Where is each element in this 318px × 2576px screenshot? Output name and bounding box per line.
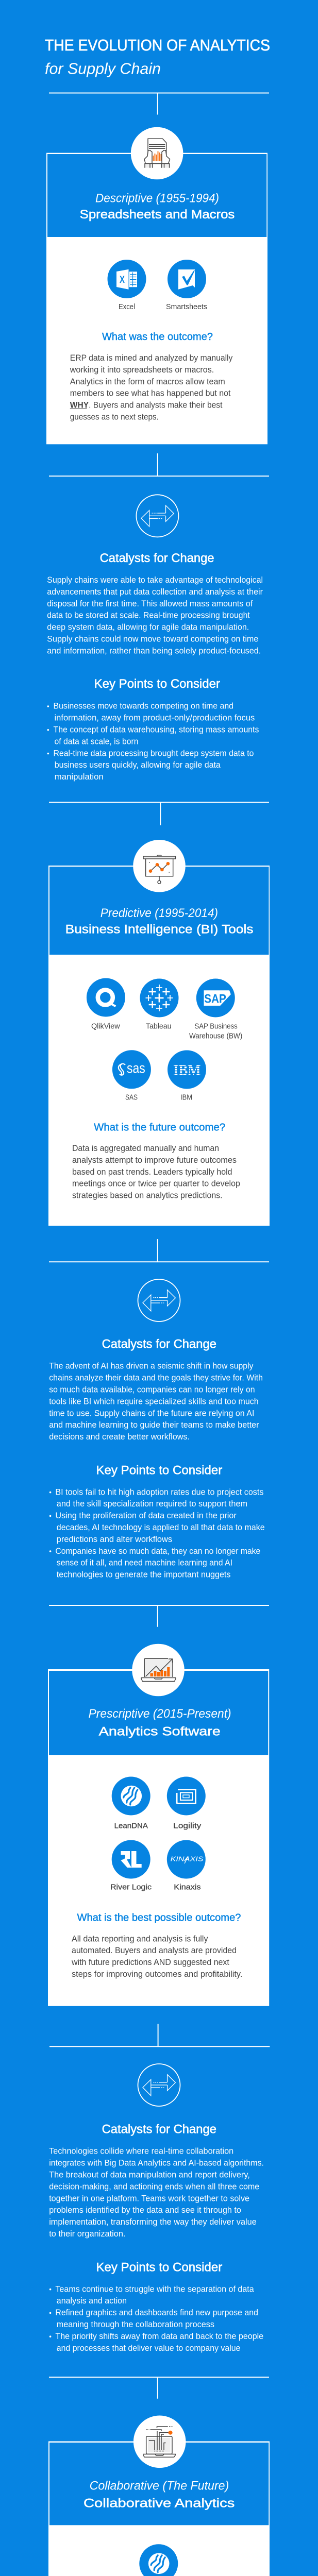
tool: Logility: Logility xyxy=(173,1821,202,1830)
section: catalysts 2: time to use. Supply chains of the future are relying on AI xyxy=(49,1409,254,1418)
connector: title to descriptive xyxy=(49,93,269,114)
text block: future outcome: strategies based on analytics predictions. xyxy=(72,1191,223,1200)
icon: report held in hands xyxy=(131,127,183,179)
icon: catalyst arrows 3 xyxy=(138,2064,180,2106)
section: key points 2: technologies to generate the important nuggets xyxy=(57,1570,231,1580)
section: key points 1: of data at scale, is born xyxy=(55,737,138,746)
section: catalysts 1: Supply chains were able to take advantage of technological xyxy=(47,575,263,585)
section: catalysts 2: so much data available, companies can no longer rely on xyxy=(49,1385,255,1394)
section: catalysts 2: tools like BI which require specialized skills and too much xyxy=(49,1397,259,1406)
section: key points 3: Refined graphics and dashboards find new purpose and xyxy=(55,2308,258,2317)
connector: key points to predictive xyxy=(49,802,269,825)
section: key points 2: and the skill specialization required to support them xyxy=(57,1499,247,1509)
section: key points 1: Businesses move towards competing on time and xyxy=(54,702,233,711)
section: key points 2: Using the proliferation of data created in the prior xyxy=(55,1511,237,1520)
section: key points 2: decades, AI technology is applied to all that data to make xyxy=(57,1523,265,1532)
section: catalysts 2: and machine learning to guide their teams to make better xyxy=(49,1420,259,1430)
heading: prescriptive era xyxy=(89,1707,231,1738)
section: key points 1: Real-time data processing brought deep system data to xyxy=(54,749,254,758)
connector: key points to collaborative xyxy=(49,2377,269,2399)
panel: predictive xyxy=(48,840,270,1226)
tool: SAP Business Warehouse: SAP Business xyxy=(194,1022,238,1031)
section: catalysts 3: Technologies collide where real-time collaboration xyxy=(49,2147,233,2156)
title xyxy=(45,37,270,77)
section: catalysts 1: and information, rather than being solely product-focused. xyxy=(47,646,261,655)
heading: collaborative era: Collaborative Analytics xyxy=(83,2497,235,2511)
tool: SAS: SAS xyxy=(125,1093,138,1102)
section: key points 3: Key Points to Consider xyxy=(96,2260,222,2274)
section: catalysts 3: Catalysts for Change xyxy=(102,2123,216,2137)
tool: Smartsheets: Smartsheets xyxy=(166,302,207,311)
tool: LeanDNA xyxy=(139,2544,178,2576)
section: catalysts 3 xyxy=(49,2123,264,2239)
heading: descriptive era: Descriptive (1955-1994) xyxy=(95,192,219,206)
section: key points 3: meaning through the collaboration process xyxy=(57,2320,214,2329)
section: key points 3: The priority shifts away from data and back to the people xyxy=(55,2332,263,2341)
text block: outcome: ERP data is mined and analyzed by manually xyxy=(70,353,233,363)
text block: best possible outcome xyxy=(71,1934,242,1979)
text block: best possible outcome: steps for improving outcomes and profitability. xyxy=(72,1970,242,1979)
section: catalysts 1: Supply chains could now move toward competing on time xyxy=(47,635,258,644)
section: catalysts 1: Catalysts for Change xyxy=(100,551,214,565)
tool: QlikView xyxy=(87,978,125,1031)
tool: SAP Business Warehouse xyxy=(189,979,242,1041)
section: key points 2: predictions and alter workflows xyxy=(57,1535,172,1544)
section: catalysts 1: deep system data, allowing for agile data manipulation. xyxy=(47,623,249,632)
section: catalysts 2: Catalysts for Change xyxy=(102,1337,216,1351)
text block: best possible outcome: with future predictions AND suggested next xyxy=(71,1958,229,1967)
tool: IBM: IBM xyxy=(173,1061,201,1079)
connector: prescriptive to catalysts xyxy=(49,2024,270,2046)
section: key points 1: business users quickly, allowing for agile data xyxy=(55,760,221,770)
title: for Supply Chain xyxy=(45,60,161,77)
question: best possible outcome: What is the best possible outcome? xyxy=(77,1912,241,1923)
section: catalysts 2 xyxy=(49,1337,263,1442)
icon: catalyst arrows 2 xyxy=(138,1279,180,1321)
section: key points 3: Teams continue to struggle with the separation of data xyxy=(55,2284,255,2294)
tool: SAS xyxy=(112,1050,151,1102)
section: key points 2: sense of it all, and need machine learning and AI xyxy=(57,1558,232,1568)
icon: laptop with circuit lines xyxy=(133,2415,186,2468)
tool: IBM xyxy=(168,1050,206,1102)
section: catalysts 2: The advent of AI has driven a seismic shift in how supply xyxy=(49,1362,254,1371)
section: key points 1 xyxy=(47,677,259,782)
tool: Excel: Excel xyxy=(119,302,135,311)
section: catalysts 3: The breakout of data manipulation and report delivery, xyxy=(49,2170,250,2179)
question: outcome: What was the outcome? xyxy=(102,331,213,343)
section: key points 1: manipulation xyxy=(55,772,104,782)
section: key points 1: Key Points to Consider xyxy=(94,677,220,691)
tool: Kinaxis xyxy=(167,1840,206,1892)
icon: catalyst arrows 1 xyxy=(136,495,178,537)
section: key points 2: BI tools fail to hit high adoption rates due to project costs xyxy=(55,1487,263,1497)
section: key points 1: The concept of data warehousing, storing mass amounts xyxy=(54,725,259,735)
section: key points 2: Key Points to Consider xyxy=(96,1464,222,1478)
text block: future outcome: based on past trends. Leaders typically hold xyxy=(72,1167,232,1177)
heading: collaborative era xyxy=(83,2479,235,2511)
tool: Kinaxis: Kinaxis xyxy=(174,1883,201,1892)
section: catalysts 2: decisions and create better workflows. xyxy=(49,1432,190,1442)
section: key points 3 xyxy=(49,2260,263,2353)
text block: outcome: Analytics in the form of macros allow team xyxy=(70,377,225,386)
tool: Logility xyxy=(167,1776,206,1830)
section: catalysts 3: to their organization. xyxy=(49,2229,126,2239)
tool: Tableau xyxy=(140,979,178,1031)
section: catalysts 1: disposal for the first time. This allowed mass amounts of xyxy=(47,599,253,608)
tool: Excel: X xyxy=(120,275,125,285)
section: catalysts 2: chains analyze their data and the goals they strive for. With xyxy=(49,1374,263,1383)
section: catalysts 3: together in one platform. Teams work together to solve xyxy=(49,2194,249,2203)
section: catalysts 3: decision-making, and actioning ends when all three come xyxy=(49,2182,259,2191)
text block: outcome xyxy=(70,353,233,421)
text block: future outcome xyxy=(72,1144,240,1200)
section: key points 1: information, away from product-only/production focus xyxy=(55,714,255,723)
tool: Tableau: Tableau xyxy=(146,1022,171,1031)
text block: future outcome: analysts attempt to improve future outcomes xyxy=(72,1156,237,1165)
tool: Kinaxis: KINAXIS xyxy=(171,1856,204,1863)
section: catalysts 1 xyxy=(47,551,263,655)
section: catalysts 3: problems identified by the data and see it through to xyxy=(49,2206,241,2215)
text block: future outcome: meetings once or twice per quarter to develop xyxy=(72,1179,240,1189)
text block: best possible outcome: All data reporting and analysis is fully xyxy=(72,1934,208,1943)
heading: prescriptive era: Analytics Software xyxy=(99,1724,221,1738)
section: catalysts 3: integrates with Big Data Analytics and AI-based algorithms. xyxy=(49,2159,264,2168)
section: catalysts 1: advancements that put data collection and analysis at their xyxy=(47,587,263,597)
text block: outcome: WHY. Buyers and analysts make their best xyxy=(70,401,223,410)
tool: SAP Business Warehouse: SAP xyxy=(204,992,226,1006)
tool: QlikView: QlikView xyxy=(91,1022,120,1031)
panel: descriptive xyxy=(46,127,267,444)
heading: prescriptive era: Prescriptive (2015-Present) xyxy=(89,1707,231,1721)
tool: River Logic: River Logic xyxy=(110,1883,152,1892)
section: key points 3: analysis and action xyxy=(57,2296,127,2306)
tool: LeanDNA xyxy=(112,1776,150,1830)
panel: prescriptive xyxy=(48,1644,269,2006)
section: key points 3: and processes that deliver value to company value xyxy=(57,2344,240,2353)
icon: laptop with growth chart xyxy=(132,1644,185,1696)
heading: predictive era xyxy=(65,906,253,937)
connector: descriptive to catalysts xyxy=(49,453,269,476)
text block: best possible outcome: automated. Buyers and analysts are provided xyxy=(72,1946,237,1955)
panel: collaborative xyxy=(48,2415,270,2576)
heading: predictive era: Business Intelligence (BI) Tools xyxy=(65,923,253,937)
tool: Excel xyxy=(107,260,146,311)
text block: outcome: members to see what has happened but not xyxy=(70,389,231,398)
question: future outcome: What is the future outcome? xyxy=(94,1122,225,1133)
icon: presentation board xyxy=(133,840,186,892)
section: key points 2 xyxy=(49,1464,265,1580)
connector: predictive to catalysts xyxy=(49,1239,269,1262)
text block: outcome: guesses as to next steps. xyxy=(70,412,159,421)
tool: LeanDNA: LeanDNA xyxy=(114,1821,148,1830)
heading: predictive era: Predictive (1995-2014) xyxy=(101,906,218,920)
text block: future outcome: Data is aggregated manually and human xyxy=(72,1144,219,1153)
section: catalysts 3: implementation, transforming the way they deliver value xyxy=(49,2217,257,2227)
connector: key points to prescriptive xyxy=(49,1605,269,1627)
heading: collaborative era: Collaborative (The Future) xyxy=(90,2479,229,2493)
section: catalysts 1: data to be stored at scale. Real-time processing brought xyxy=(47,611,250,620)
text block: outcome: working it into spreadsheets or macros. xyxy=(70,365,214,375)
section: key points 2: Companies have so much data, they can no longer make xyxy=(55,1547,260,1556)
heading: descriptive era: Spreadsheets and Macros xyxy=(80,208,235,222)
tool: SAS: sas xyxy=(127,1060,145,1076)
title: THE EVOLUTION OF ANALYTICS xyxy=(45,37,270,54)
heading: descriptive era xyxy=(80,192,235,222)
tool: Smartsheets xyxy=(166,260,207,311)
tool: SAP Business Warehouse: Warehouse (BW) xyxy=(189,1032,242,1041)
tool: River Logic xyxy=(110,1840,152,1892)
tool: IBM: IBM xyxy=(180,1093,192,1102)
